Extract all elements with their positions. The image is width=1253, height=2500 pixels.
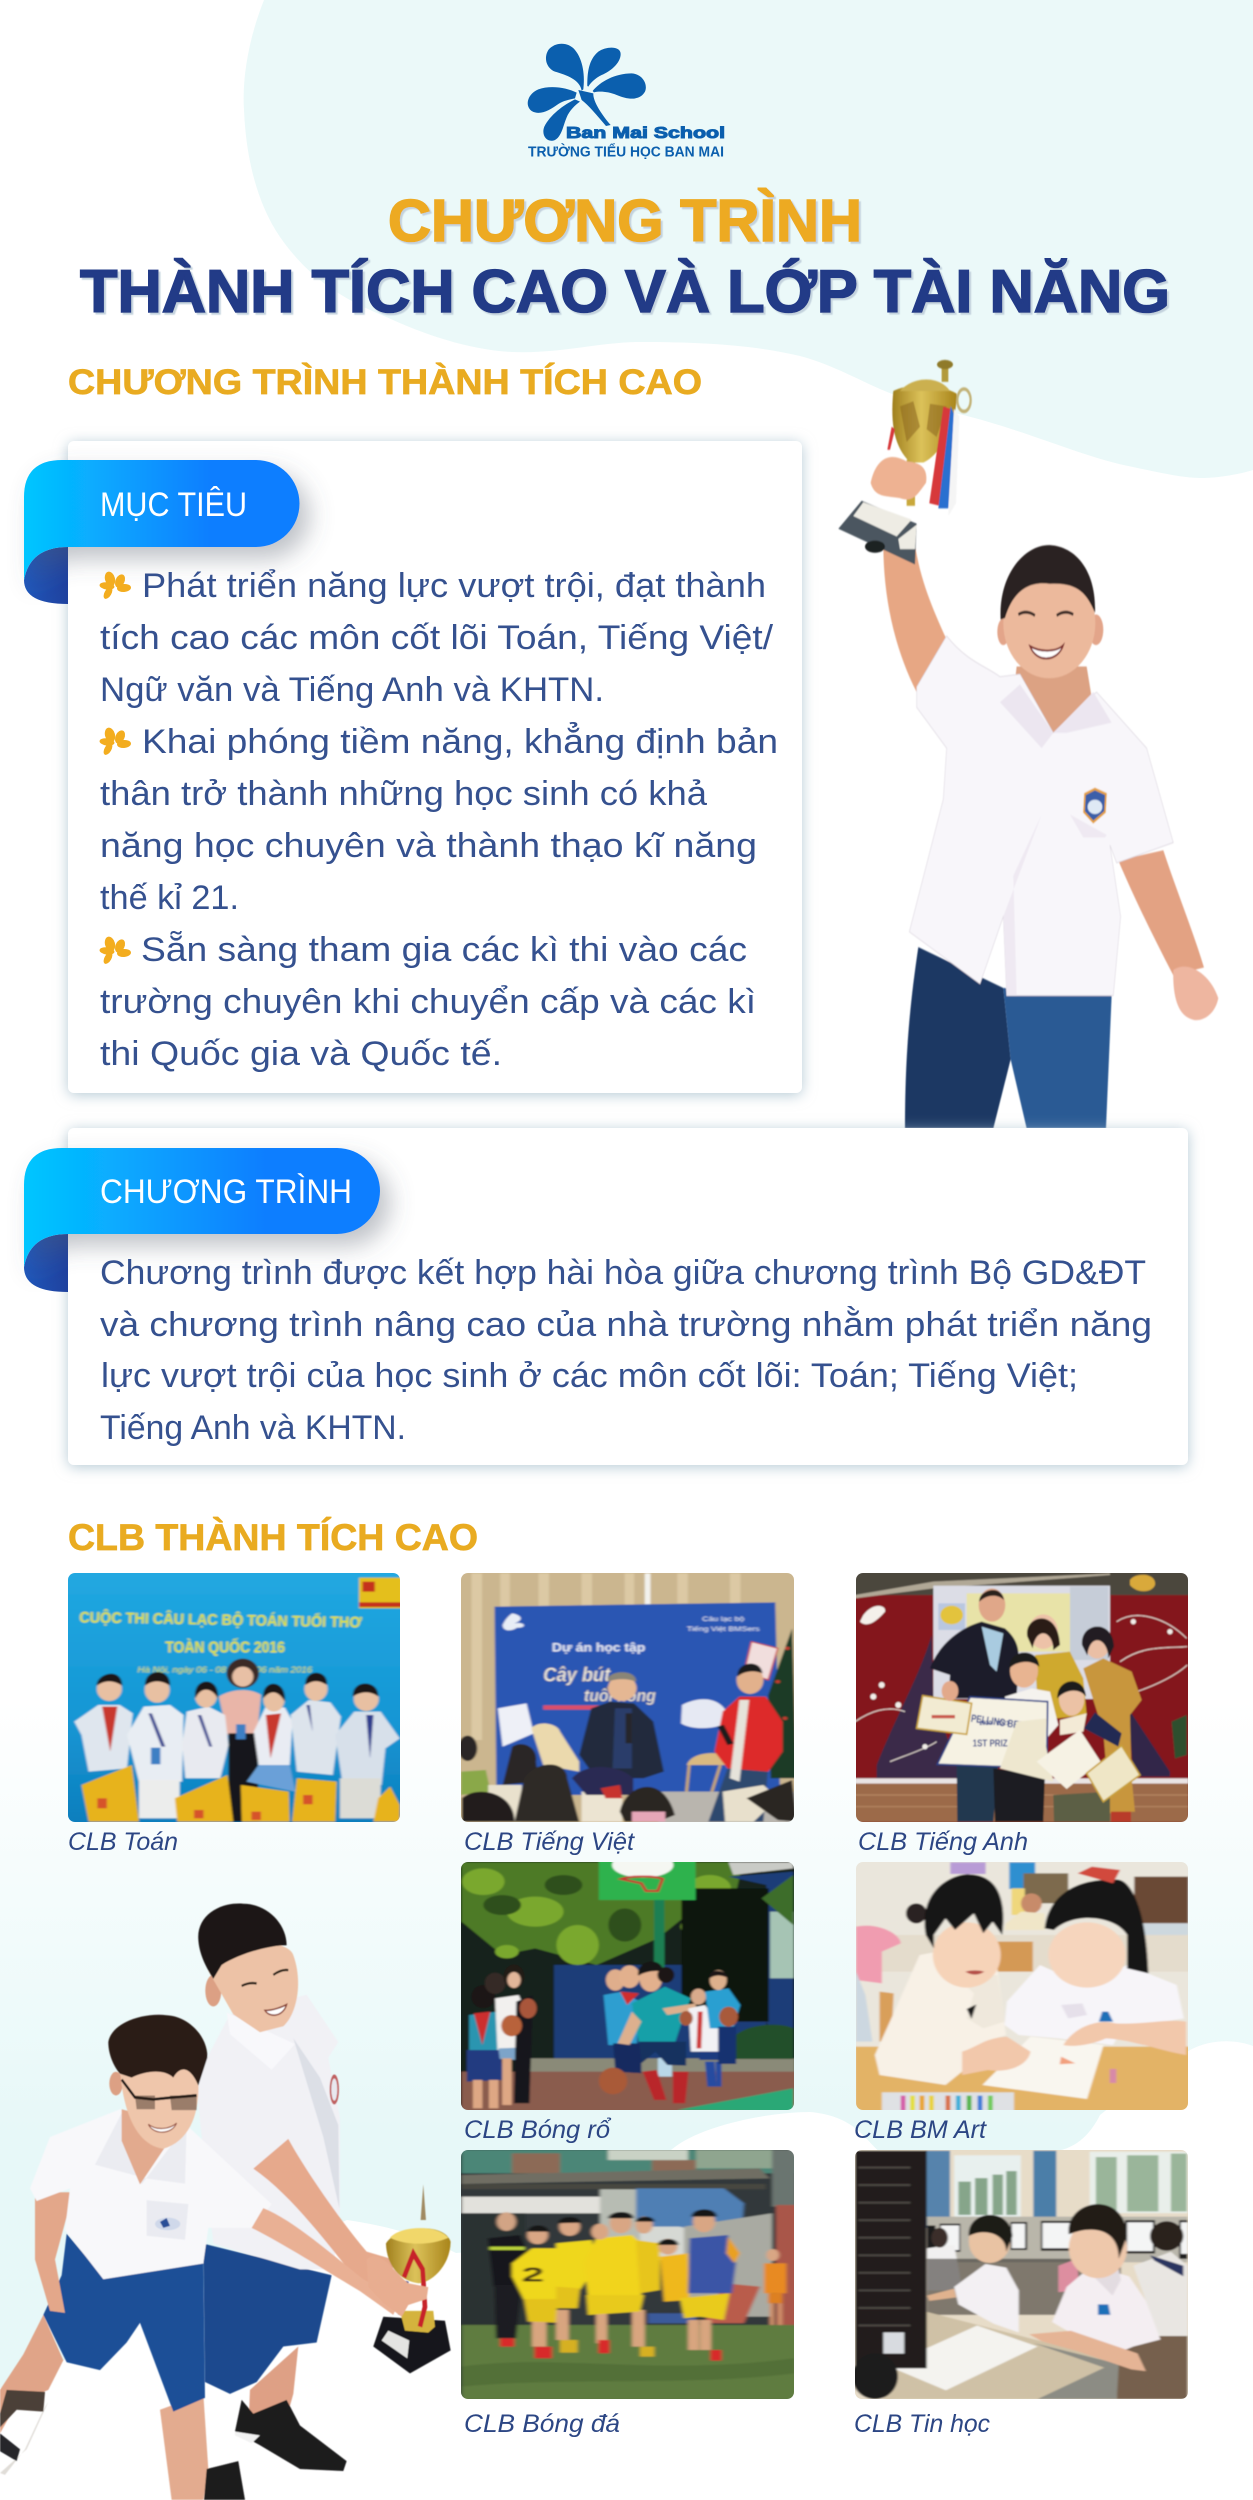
players bbox=[532, 2310, 711, 2350]
logo: Ban Mai School: Ban Mai School bbox=[566, 125, 725, 142]
grass bbox=[462, 2325, 798, 2400]
photo: CLB Tiếng Việt: Tiếng Việt BMSers bbox=[687, 1625, 760, 1633]
spelling bee board bbox=[937, 1697, 1048, 1768]
text: program description: lực vượt trội của học sinh ở các môn cốt lõi: Toán; Tiếng Việt; bbox=[101, 1357, 1078, 1395]
floor bbox=[1117, 2336, 1188, 2399]
text: goals list: tích cao các môn cốt lõi Toán, Tiếng Việt/ bbox=[100, 619, 774, 657]
right girl bbox=[1005, 1965, 1184, 2045]
text: goals list: Khai phóng tiềm năng, khẳng định bản bbox=[142, 723, 778, 761]
table bbox=[855, 2047, 1191, 2112]
front boy arm bbox=[252, 2208, 400, 2315]
text: goals list: thân trở thành những học sinh có khả bbox=[100, 775, 707, 813]
caption: CLB Bóng rổ: CLB Bóng rổ bbox=[464, 2116, 612, 2144]
photo: CLB Tiếng Việt: Câu lạc bộ bbox=[702, 1615, 745, 1623]
panel: chương trình bbox=[24, 1128, 1188, 1465]
caption: CLB Tiếng Anh: CLB Tiếng Anh bbox=[858, 1828, 1028, 1856]
photo: CLB Tiếng Việt: tuổi hồng bbox=[584, 1686, 656, 1706]
text: goals list: Phát triển năng lực vượt trội, đạt thành bbox=[142, 567, 766, 605]
hands on trophy bbox=[367, 2256, 428, 2317]
caption: CLB BM Art: CLB BM Art bbox=[854, 2116, 987, 2144]
boy two bbox=[1052, 2266, 1160, 2350]
illustration: boy raising trophy bbox=[838, 360, 1218, 1128]
black shoes bbox=[235, 2400, 347, 2471]
back boy shorts bbox=[203, 2244, 332, 2394]
trophy cup bbox=[907, 460, 915, 506]
heading: CLB thành tích cao: CLB THÀNH TÍCH CAO bbox=[68, 1517, 478, 1558]
boys bbox=[604, 1992, 640, 2045]
icon: bullet flower 2 bbox=[99, 726, 131, 756]
text: program description: Tiếng Anh và KHTN. bbox=[100, 1409, 406, 1447]
man in red jacket bbox=[708, 1768, 768, 1822]
photo: CLB Tiếng Anh: 2020 - 2021 bbox=[979, 1720, 1010, 1727]
jeans bbox=[905, 947, 1011, 1128]
panel: mục tiêu bbox=[24, 441, 802, 1093]
trophy base bbox=[838, 501, 917, 564]
label: chương trình bbox=[24, 1148, 380, 1292]
back boy arm bbox=[253, 2139, 393, 2291]
label: mục tiêu bbox=[24, 460, 300, 604]
label: chương trình: CHƯƠNG TRÌNH bbox=[100, 1173, 352, 1211]
front boy shorts bbox=[43, 2234, 205, 2412]
left girl bbox=[875, 1948, 1006, 2085]
photo: CLB Tiếng Việt: Dự án học tập bbox=[552, 1642, 645, 1655]
head bbox=[997, 619, 1009, 645]
label: mục tiêu: MỤC TIÊU bbox=[100, 486, 247, 524]
caption: CLB Tin học: CLB Tin học bbox=[854, 2410, 990, 2438]
neck bbox=[1013, 667, 1092, 733]
floor bbox=[658, 1792, 797, 1825]
audience bbox=[503, 1744, 538, 1785]
referee bbox=[488, 2235, 528, 2287]
text: program description bbox=[100, 1254, 1152, 1447]
photo: CLB Bóng đá bbox=[456, 2148, 800, 2402]
photo: CLB Tin học bbox=[850, 2147, 1192, 2403]
photo: CLB Tiếng Anh: 1ST PRIZ bbox=[973, 1739, 1008, 1750]
trophy bbox=[373, 2184, 451, 2373]
photo: CLB Toán: CUỘC THI CÂU LẠC BỘ TOÁN TUỔI THƠ bbox=[79, 1609, 363, 1632]
photo: CLB Tiếng Anh: PELLING BEE bbox=[970, 1713, 1025, 1732]
monitor tower bbox=[855, 2151, 927, 2368]
text: goals list: năng học chuyên và thành thạo kĩ năng bbox=[100, 827, 757, 865]
icon: bullet flower 3 bbox=[99, 935, 131, 965]
photo: CLB Toán: TOÀN QUỐC 2016 bbox=[165, 1639, 285, 1656]
title bbox=[80, 188, 1170, 325]
people bbox=[930, 1622, 1019, 1698]
logo: Ban Mai School bbox=[528, 44, 725, 160]
right arm and fist bbox=[1118, 850, 1204, 975]
caption: CLB Tiếng Việt: CLB Tiếng Việt bbox=[464, 1828, 635, 1856]
back boy head bbox=[205, 1975, 221, 2006]
illustration: two boys holding trophy bbox=[0, 1904, 451, 2500]
text: goals list: thi Quốc gia và Quốc tế. bbox=[100, 1035, 502, 1073]
text: goals list: thế kỉ 21. bbox=[100, 879, 239, 917]
photo: CLB Toán bbox=[60, 1565, 405, 1828]
shirt badge bbox=[1084, 789, 1106, 822]
photo: CLB BM Art bbox=[851, 1860, 1191, 2113]
photo: CLB Bóng rổ bbox=[455, 1852, 799, 2113]
desk bbox=[883, 2311, 1117, 2399]
sandal bbox=[0, 2402, 48, 2475]
tree bbox=[768, 1628, 797, 1778]
raised arm bbox=[883, 544, 947, 702]
heading: Chương trình thành tích cao: CHƯƠNG TRÌNH THÀNH TÍCH CAO bbox=[68, 362, 702, 402]
photo: CLB Tiếng Anh bbox=[850, 1572, 1193, 1825]
logo: Ban Mai School: TRƯỜNG TIỂU HỌC BAN MAI bbox=[528, 142, 724, 160]
front boy neck and head bbox=[122, 2109, 180, 2184]
back boy shirt bbox=[197, 1995, 340, 2269]
backboard bbox=[599, 1860, 696, 1900]
background kids bbox=[927, 2245, 963, 2290]
white shirt bbox=[909, 636, 1173, 996]
photo: CLB Tiếng Việt bbox=[457, 1572, 797, 1825]
text: goals list: trường chuyên khi chuyển cấp và các kì bbox=[100, 983, 756, 1021]
icon: bullet flower 1 bbox=[99, 570, 131, 600]
photo: CLB Toán: Hà Nội, ngày 06 - 08 tháng 06 năm 2016 bbox=[138, 1666, 313, 1675]
legs bbox=[0, 2315, 63, 2433]
girls bbox=[469, 2012, 498, 2052]
background: bottom teal blob bbox=[0, 1700, 1253, 2388]
boy one bbox=[954, 2264, 1019, 2332]
foliage bbox=[462, 1862, 743, 1965]
trophy ribbons bbox=[929, 406, 951, 506]
text: program description: và chương trình nâng cao của nhà trường nhằm phát triển năng bbox=[100, 1306, 1152, 1344]
title: THÀNH TÍCH CAO VÀ LỚP TÀI NĂNG bbox=[80, 258, 1170, 325]
text: goals list: Ngữ văn và Tiếng Anh và KHTN. bbox=[100, 671, 604, 709]
man in dark jacket bbox=[579, 1702, 664, 1778]
hand on trophy bbox=[871, 457, 926, 500]
photo: CLB Bóng đá: 2 bbox=[522, 2264, 544, 2286]
front boy shirt bbox=[30, 2109, 272, 2279]
text: goals list bbox=[100, 567, 778, 1073]
caption: CLB Toán: CLB Toán bbox=[68, 1828, 178, 1856]
front boy left arm bbox=[35, 2192, 73, 2313]
photo: CLB Tiếng Việt: Cây bút bbox=[543, 1665, 612, 1687]
text: goals list: Sẵn sàng tham gia các kì thi vào các bbox=[141, 931, 747, 969]
title: CHƯƠNG TRÌNH bbox=[388, 188, 862, 254]
text: program description: Chương trình được kết hợp hài hòa giữa chương trình Bộ GD&ĐT bbox=[100, 1254, 1146, 1292]
caption: CLB Bóng đá: CLB Bóng đá bbox=[464, 2410, 620, 2438]
background: top teal blob bbox=[244, 0, 1253, 478]
